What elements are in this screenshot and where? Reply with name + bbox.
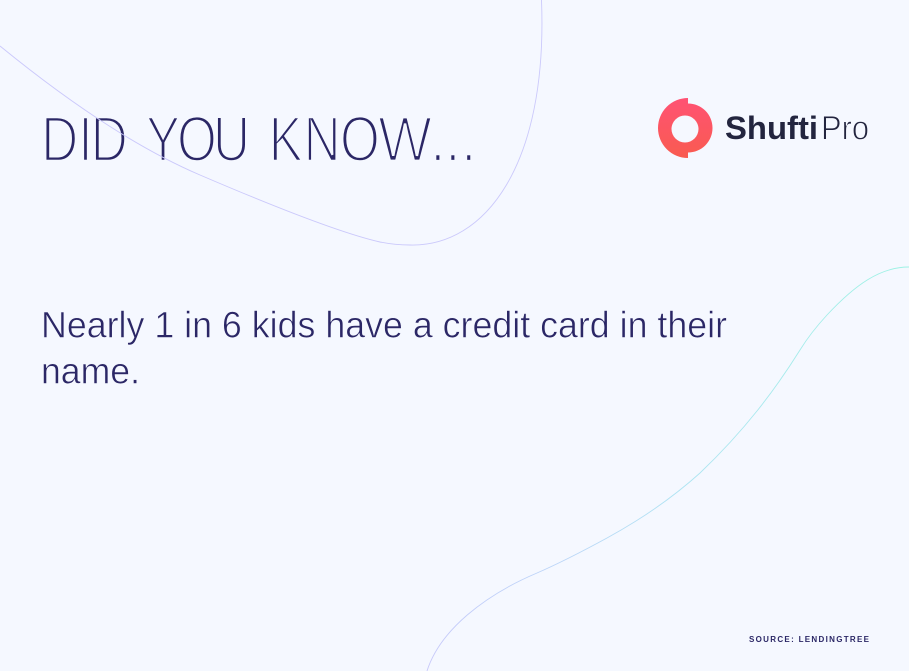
logo: Shufti Pro — [658, 98, 869, 158]
title: W — [378, 103, 433, 175]
source note: SOURCE: LENDINGTREE — [749, 635, 870, 644]
body text: Nearly 1 in 6 kids have a credit card in their — [41, 303, 727, 345]
title: ... — [431, 105, 476, 175]
body text: name. — [41, 349, 140, 391]
top decorative curve — [0, 0, 542, 245]
bottom decorative curve — [427, 267, 909, 671]
body text — [41, 303, 727, 391]
logo wordmark: Pro: Pro — [821, 110, 869, 148]
logo wordmark: Shufti: Shufti — [725, 110, 818, 146]
icon: logo ring — [658, 98, 712, 158]
title: DIDYOUKNO — [41, 105, 380, 175]
